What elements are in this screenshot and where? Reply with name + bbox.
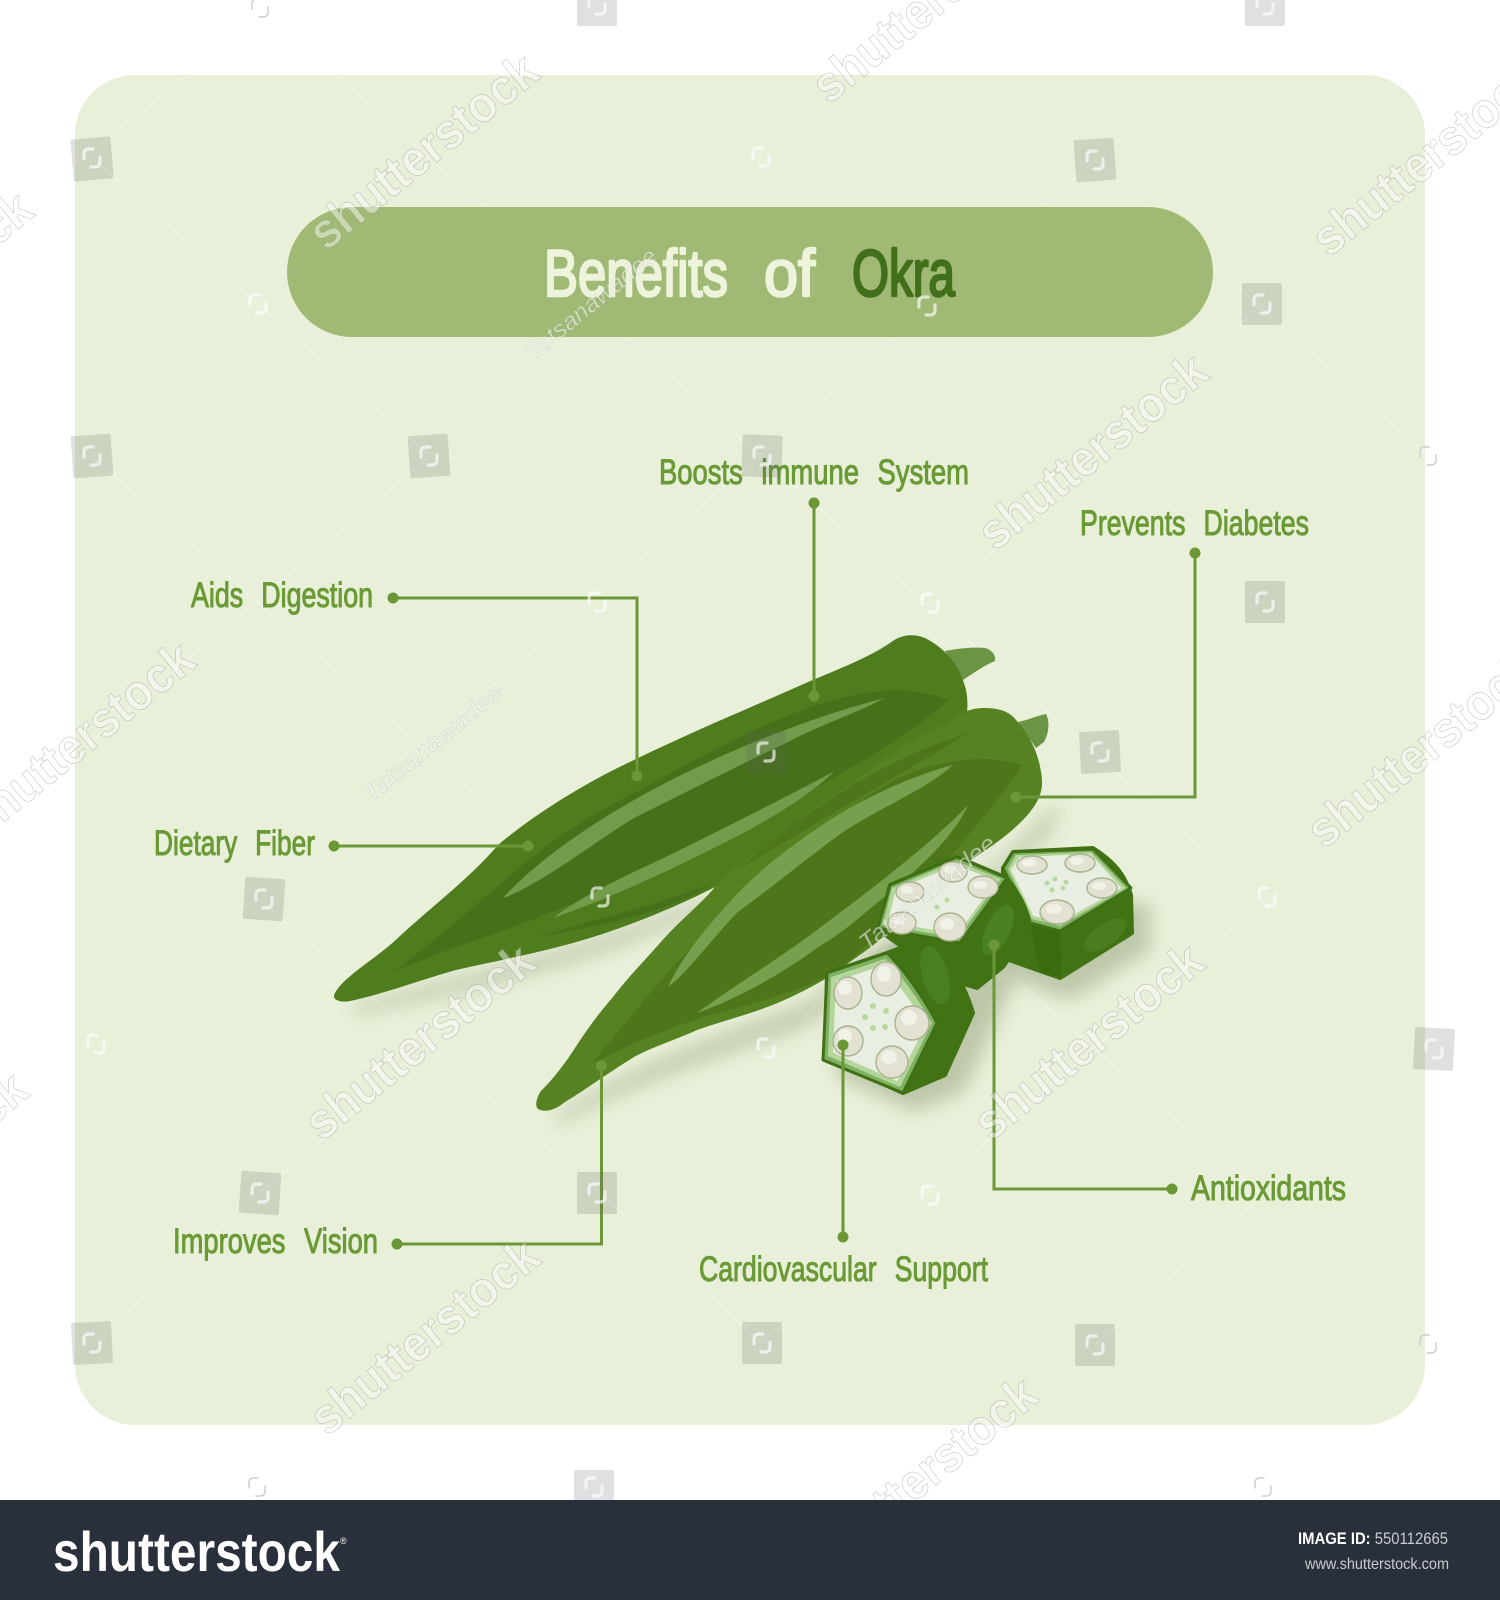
callout: Improves Vision: Improves Vision	[173, 1222, 378, 1261]
title	[544, 236, 955, 310]
icon: front okra stem	[1018, 714, 1048, 748]
title banner	[287, 207, 1213, 337]
panel: background card	[75, 75, 1425, 1425]
watermark overlay: Tatsanawadee	[854, 830, 1001, 957]
callout: Boosts immune System: Boosts immune System	[659, 453, 969, 492]
watermark overlay: shutterstock	[298, 42, 549, 261]
icon: middle okra slice	[878, 857, 1030, 988]
title: Benefits	[544, 236, 728, 310]
callout: Improves Vision	[173, 1060, 607, 1261]
footer logo: shutterstock	[53, 1520, 341, 1583]
callout: Aids Digestion	[191, 576, 642, 782]
callout: Prevents Diabetes	[1010, 504, 1309, 802]
icon: front okra pod	[536, 708, 1042, 1111]
watermark overlay: shutterstock	[294, 932, 545, 1151]
callout: Prevents Diabetes: Prevents Diabetes	[1080, 504, 1309, 543]
title: Okra	[852, 236, 955, 310]
footer bar	[0, 1500, 1500, 1600]
icon: back okra slice	[1002, 848, 1132, 978]
watermark overlay: Tatsanawadee	[520, 243, 663, 366]
callout: Antioxidants	[988, 940, 1346, 1208]
callout: Dietary Fiber	[154, 824, 534, 863]
callout: Cardiovascular Support: Cardiovascular Support	[699, 1250, 988, 1289]
footer url: www.shutterstock.com	[1304, 1556, 1449, 1573]
footer registered mark: ®	[340, 1536, 347, 1546]
watermark overlay: shutterstock	[963, 932, 1214, 1151]
watermark overlay: shutterstock	[967, 342, 1218, 561]
footer image id: IMAGE ID: 550112665	[1298, 1529, 1448, 1548]
watermark overlay: shutterstock	[299, 1227, 550, 1446]
icon: front okra slice	[823, 939, 973, 1093]
callout: Cardiovascular Support	[699, 1040, 988, 1289]
icon: back okra pod	[334, 635, 967, 1002]
watermark overlay: shutterstock	[797, 1365, 1048, 1584]
callout: Boosts immune System	[659, 453, 969, 702]
callout: Dietary Fiber: Dietary Fiber	[154, 824, 315, 863]
icon: back okra stem	[945, 648, 995, 680]
callout: Antioxidants: Antioxidants	[1191, 1169, 1346, 1208]
watermark overlay: Tatsanawadee	[358, 678, 508, 808]
title: of	[764, 236, 816, 310]
callout: Aids Digestion: Aids Digestion	[191, 576, 373, 615]
illustration: okra pods and slices	[334, 635, 1150, 1124]
